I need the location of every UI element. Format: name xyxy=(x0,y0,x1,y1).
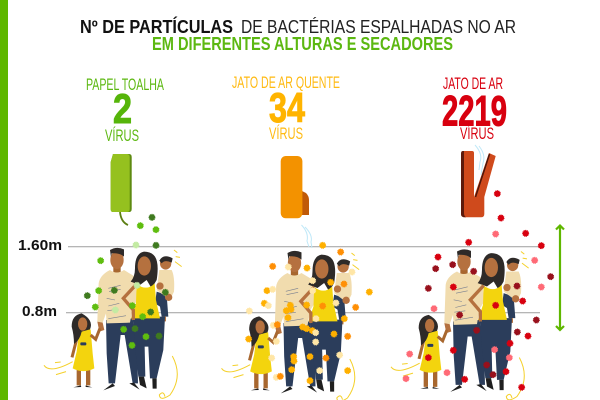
panel: air jet heading: JATO DE AR xyxy=(443,74,503,93)
icon: hot air dryer xyxy=(281,156,312,248)
panel: hot air jet heading: 34 xyxy=(269,84,305,131)
family illustration: air jet xyxy=(391,249,529,400)
panel: hot air jet heading: JATO DE AR QUENTE xyxy=(232,73,340,92)
title: DE BACTÉRIAS ESPALHADAS NO AR xyxy=(241,17,516,37)
panel: air jet heading: VÍRUS xyxy=(460,124,494,143)
panel: paper towel heading xyxy=(86,75,164,145)
height line 1.60m: 1.60m xyxy=(18,238,62,254)
particles: green xyxy=(84,214,168,348)
particles: red xyxy=(403,191,554,390)
family illustration: paper towel xyxy=(44,248,182,398)
panel: hot air jet heading: VÍRUS xyxy=(269,124,303,143)
panel: air jet heading: 2219 xyxy=(442,88,507,136)
panel: air jet heading xyxy=(442,74,507,143)
panel: hot air jet heading xyxy=(232,73,340,143)
height line 0.8m: 0.8m xyxy=(22,304,57,320)
family illustration: hot air jet xyxy=(221,251,359,400)
panel: paper towel heading: PAPEL TOALHA xyxy=(86,75,164,94)
icon: paper towel dispenser xyxy=(111,154,132,225)
green sidebar xyxy=(0,0,8,400)
icon: air jet dryer xyxy=(461,145,496,217)
particles: orange xyxy=(246,242,372,384)
panel: paper towel heading: VÍRUS xyxy=(105,126,139,145)
title xyxy=(80,16,516,54)
title: EM DIFERENTES ALTURAS E SECADORES xyxy=(152,34,453,54)
panel: paper towel heading: 2 xyxy=(113,85,132,132)
title: Nº DE PARTÍCULAS xyxy=(80,16,233,37)
arrow: height range xyxy=(556,226,564,330)
